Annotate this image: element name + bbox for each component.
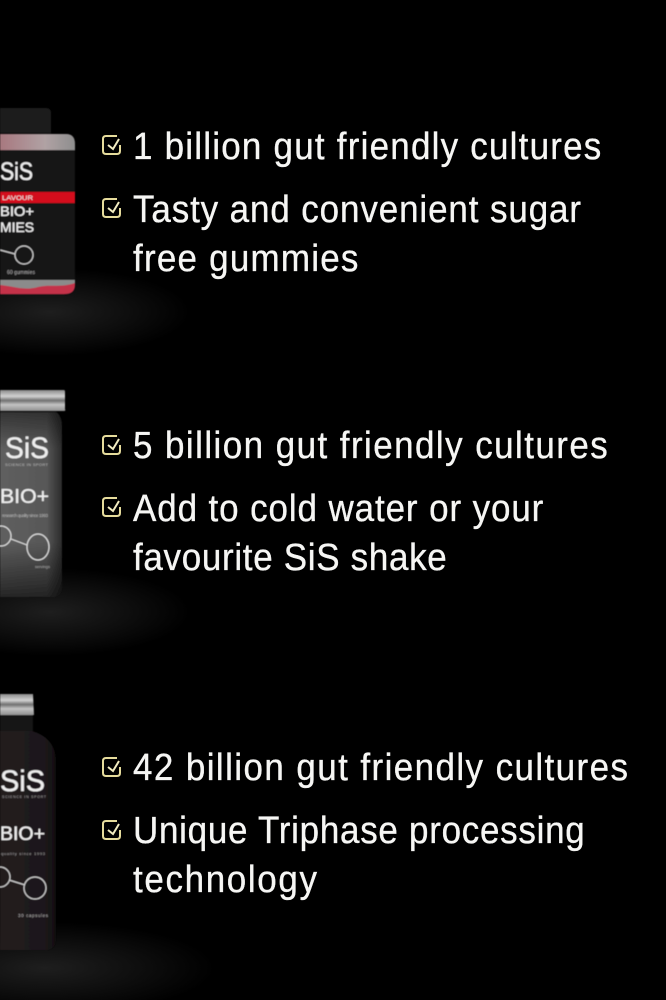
flavour text: LAVOUR xyxy=(2,195,33,202)
product name: BIO+ xyxy=(0,486,49,508)
product name: BIO+ xyxy=(0,203,34,219)
feature text continued: technology xyxy=(133,858,318,900)
floor glow: bottom bottle xyxy=(0,922,215,1000)
metal lid xyxy=(0,694,34,715)
brand logo: SiS xyxy=(0,765,45,798)
feature text: 1 billion gut friendly cultures xyxy=(133,125,601,167)
product: powder jar xyxy=(0,390,65,597)
feature text: Add to cold water or your xyxy=(133,487,543,529)
floor glow: middle bottle xyxy=(0,568,190,656)
feature text: Unique Triphase processing xyxy=(133,809,585,851)
serving badge xyxy=(0,246,33,264)
red flavour band xyxy=(0,192,75,203)
checkbox icon xyxy=(103,436,120,454)
metal lid xyxy=(0,390,65,411)
product: gummies bottle xyxy=(0,108,75,295)
quantity text: 60 gummies xyxy=(7,270,36,276)
feature group: gummies xyxy=(103,125,601,279)
floor glow: top bottle xyxy=(0,268,190,356)
badges xyxy=(0,526,49,560)
brand logo: SiS xyxy=(5,432,49,465)
bottle body xyxy=(0,134,75,295)
feature text: 5 billion gut friendly cultures xyxy=(133,424,608,466)
neck xyxy=(0,715,33,731)
product: capsules bottle xyxy=(0,694,56,950)
brand logo: SiS xyxy=(0,158,33,186)
jar body xyxy=(0,412,62,597)
bottle cap xyxy=(0,108,51,133)
feature text: 42 billion gut friendly cultures xyxy=(133,746,628,788)
badges xyxy=(0,867,46,899)
product name line two: MIES xyxy=(0,219,34,235)
bottle body xyxy=(0,731,56,950)
bottom gummies strip xyxy=(0,280,75,294)
product name: BIO+ xyxy=(0,824,45,845)
small label line: quality since 1993 xyxy=(1,851,46,856)
feature group: powder xyxy=(103,424,608,578)
feature text continued: favourite SiS shake xyxy=(133,536,447,578)
feature text: Tasty and convenient sugar xyxy=(133,188,581,230)
logo strapline: SCIENCE IN SPORT xyxy=(2,795,47,799)
small label line: research quality since 1993 xyxy=(2,513,48,518)
checkbox icon xyxy=(103,498,120,516)
checkbox icon xyxy=(103,136,120,154)
logo strapline: SCIENCE IN SPORT xyxy=(5,462,49,467)
checkbox icon xyxy=(103,821,120,839)
quantity text: servings xyxy=(35,564,50,569)
feature text continued: free gummies xyxy=(133,237,358,279)
quantity text: 30 capsules xyxy=(18,913,49,918)
top gummies strip xyxy=(0,134,75,150)
checkbox icon xyxy=(103,758,120,776)
feature group: capsules xyxy=(103,746,628,900)
checkbox icon xyxy=(103,199,120,217)
